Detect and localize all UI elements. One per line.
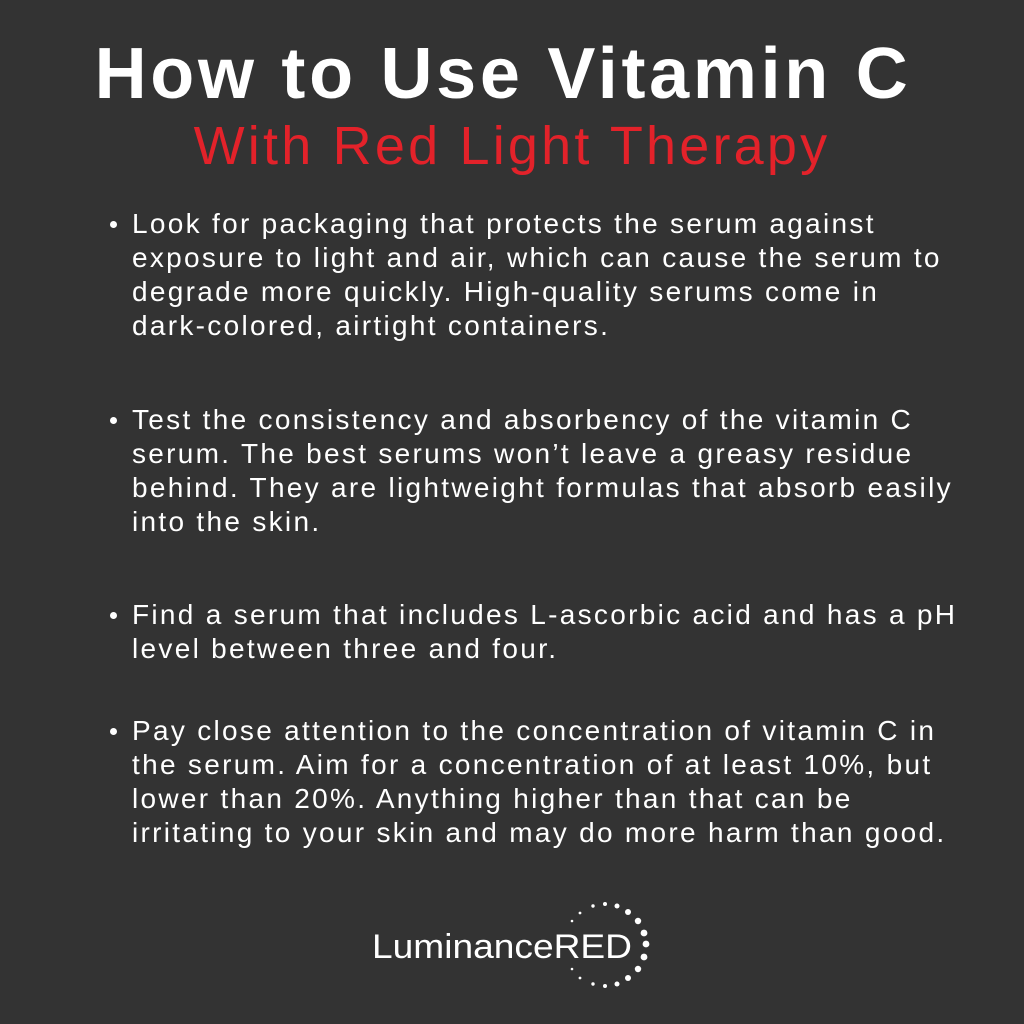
- bullet 4: irritating to your skin and may do more harm than good.: [132, 817, 946, 848]
- bullet 4: lower than 20%. Anything higher than that can be: [132, 783, 853, 814]
- bullet 1: [132, 207, 1012, 343]
- bullet 3: level between three and four.: [132, 633, 558, 664]
- bullet 2: Test the consistency and absorbency of the vitamin C: [132, 404, 913, 435]
- bullet 1: exposure to light and air, which can cause the serum to: [132, 242, 942, 273]
- bullet 2: into the skin.: [132, 506, 321, 537]
- bullet 1: degrade more quickly. High-quality serums come in: [132, 276, 879, 307]
- bullet 1: Look for packaging that protects the serum against: [132, 208, 876, 239]
- bullet 3: Find a serum that includes L-ascorbic acid and has a pH: [132, 599, 957, 630]
- title: How to Use Vitamin C: [95, 34, 911, 114]
- logo: [372, 902, 650, 988]
- bullet 2: serum. The best serums won’t leave a greasy residue: [132, 438, 913, 469]
- bullet 4: Pay close attention to the concentration of vitamin C in: [132, 715, 936, 746]
- bullet 2: [132, 403, 1012, 539]
- bullet 3: [132, 598, 1012, 666]
- subtitle: With Red Light Therapy: [194, 116, 830, 176]
- logo: LuminanceRED: [372, 928, 632, 966]
- bullet 2: behind. They are lightweight formulas that absorb easily: [132, 472, 953, 503]
- bullet 1: dark-colored, airtight containers.: [132, 310, 610, 341]
- bullet 4: the serum. Aim for a concentration of at least 10%, but: [132, 749, 932, 780]
- bullet 4: [132, 714, 1012, 850]
